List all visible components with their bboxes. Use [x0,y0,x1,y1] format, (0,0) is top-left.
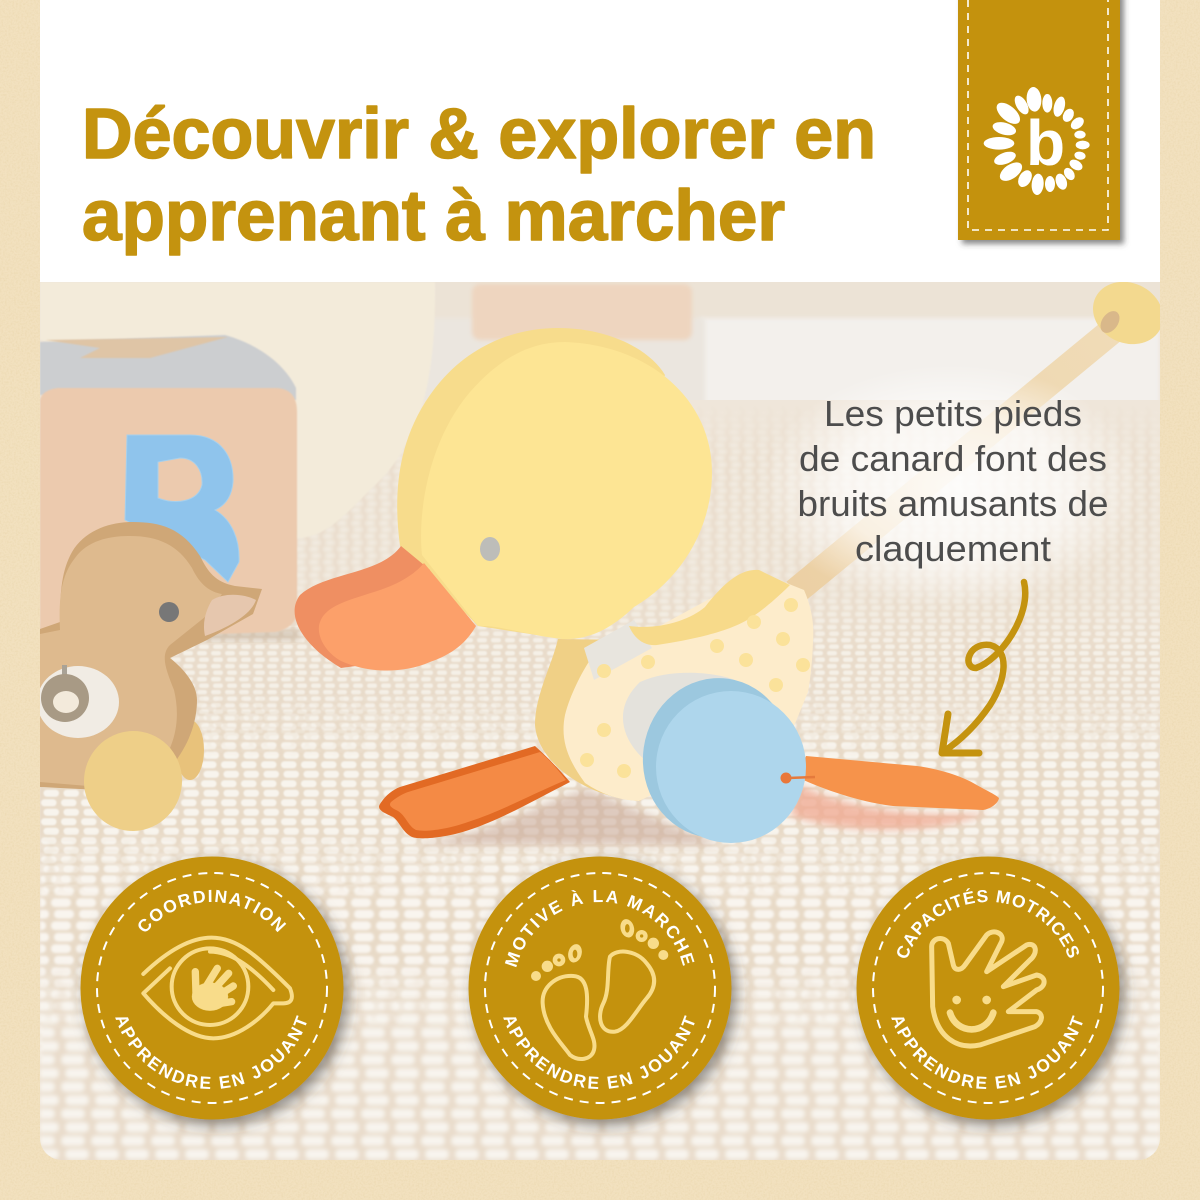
axle hole [780,772,792,784]
backdrop [40,282,1160,400]
stitching [873,873,1103,1103]
wooden duck [37,522,262,839]
far wheel [176,720,204,780]
badge disc [468,856,732,1120]
callout text: de canard font des [799,438,1107,479]
spots [580,598,810,778]
left foot [379,746,570,838]
brand tag [958,0,1120,240]
block top face [40,335,296,400]
bottom label: APPRENDRE EN JOUANT [891,1015,1083,1089]
right foot [799,756,999,810]
bottom label: APPRENDRE EN JOUANT [503,1015,695,1089]
push stick [795,271,1173,592]
badge: coordination [76,852,358,1136]
stitching [485,873,715,1103]
wing top [629,570,790,645]
pull duck toy [295,328,999,848]
logo letter: b [1026,107,1065,179]
head side [397,328,665,639]
block shadow [202,627,302,643]
white header panel [40,0,1160,283]
beak front [319,563,476,671]
wood body [40,522,262,790]
icon: footprints [531,918,668,1059]
wheel edge [642,678,772,836]
stitching [97,873,327,1103]
title: Découvrir & explorer en [82,95,876,174]
arrow [942,582,1025,753]
hand in iris [192,968,233,1011]
bottom label: APPRENDRE EN JOUANT [115,1015,307,1089]
badge disc [856,856,1120,1120]
stitching [968,0,1108,230]
yellow wheel [84,731,182,831]
body edge [535,639,640,801]
head [295,328,712,671]
callout text: bruits amusants de [798,483,1108,524]
badge: capacites motrices [852,852,1134,1136]
callout text: Les petits pieds [824,393,1082,434]
head eye [480,537,500,561]
bell [41,665,89,722]
title [82,95,876,256]
wheel face [656,691,806,843]
top label: CAPACITÉS MOTRICES [897,888,1079,958]
callout text: claquement [855,528,1051,569]
rug [40,400,1160,1165]
head front [421,342,712,639]
beak [204,595,256,636]
letter B [125,435,239,582]
letter A on top [45,337,228,358]
grey belly patch [623,672,734,758]
shadow under toy [410,785,990,845]
window [37,666,119,738]
badge disc [80,856,344,1120]
icon: sunflower logo [984,86,1090,195]
stick knob [1093,282,1160,344]
badge: motive a la marche [464,852,746,1136]
product photo [37,271,1173,1165]
cord [788,777,815,778]
block front face [40,388,297,640]
icon: smiling hand [932,932,1044,1046]
cream cushion [305,314,424,536]
eye [159,602,179,622]
beak side [295,546,430,668]
alphabet block [40,335,300,640]
top label: MOTIVE À LA MARCHE [504,890,694,968]
tag ribbon [958,0,1120,240]
body front [564,572,813,801]
callout text [798,393,1108,569]
title: apprenant à marcher [82,177,785,256]
neck [584,620,652,680]
callout glow [782,383,1122,595]
top label: COORDINATION [138,890,286,932]
wood front [40,536,222,787]
icon: eye with hand [143,938,292,1038]
